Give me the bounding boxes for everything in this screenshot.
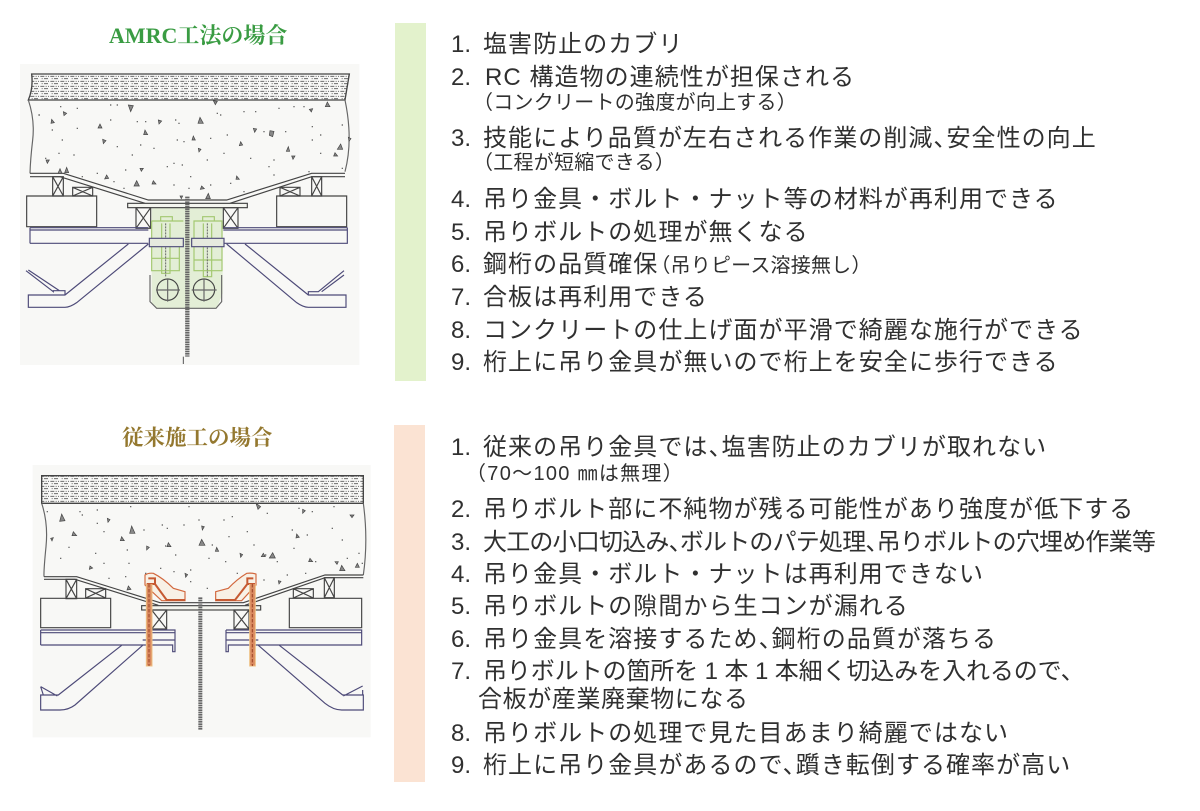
list: conventional method problems: 吊りボルトの箇所を 1 本 1 本細く切込みを入れるので、 <box>483 658 1085 685</box>
item 8 <box>451 720 1009 747</box>
list: AMRC method advantages: 9. <box>451 349 471 376</box>
list: AMRC method advantages: 桁上に吊り金具が無いので桁上を安全に歩行できる <box>483 349 1059 376</box>
item 5 <box>451 219 809 246</box>
list: AMRC method advantages: 塩害防止のカブリ <box>483 31 683 58</box>
list: AMRC method advantages: 6. <box>451 251 471 278</box>
list: conventional method problems: 8. <box>451 720 471 747</box>
list: AMRC method advantages: 1. <box>451 31 471 58</box>
heading: AMRC method: AMRC工法の場合 <box>109 23 287 48</box>
item 6 <box>451 626 997 653</box>
list: AMRC method advantages: 5. <box>451 219 471 246</box>
list: conventional method problems: 従来の吊り金具では、塩害防止のカブリが取れない <box>483 434 1047 461</box>
list: AMRC method advantages: 4. <box>451 186 471 213</box>
list: conventional method problems: 吊りボルトの処理で見た目あまり綺麗ではない <box>483 720 1009 747</box>
item 9 <box>451 752 1071 779</box>
list: conventional method problems: 4. <box>451 561 471 588</box>
list: conventional method problems: 合板が産業廃棄物になる <box>478 686 749 713</box>
list: conventional method problems: 7. <box>451 658 471 685</box>
list: AMRC method advantages: 鋼桁の品質確保（吊りピース溶接無し） <box>483 251 872 278</box>
item 8 <box>451 317 1084 344</box>
bar: orange marker <box>394 425 425 782</box>
item 1 note: （70～100 ㎜は無理） <box>466 463 684 485</box>
item 4 <box>451 186 1059 213</box>
item 3 <box>451 125 1097 152</box>
list: AMRC method advantages: 3. <box>451 125 471 152</box>
list: conventional method problems: 3. <box>451 529 471 556</box>
list: conventional method problems: 桁上に吊り金具があるので、躓き転倒する確率が高い <box>483 752 1071 779</box>
list: conventional method problems: 大工の小口切込み、ボルトのパテ処理、吊りボルトの穴埋め作業等 <box>483 529 1155 556</box>
list: conventional method problems: 1. <box>451 434 471 461</box>
item 3 <box>451 529 1155 556</box>
list: conventional method problems: 5. <box>451 593 471 620</box>
bar: green marker <box>395 23 426 381</box>
list: AMRC method advantages: 技能により品質が左右される作業の削減、安全性の向上 <box>483 125 1097 152</box>
list: AMRC method advantages: 8. <box>451 317 471 344</box>
list: conventional method problems: 吊りボルトの隙間から生コンが漏れる <box>483 593 909 620</box>
item 7 <box>451 284 708 311</box>
list: conventional method problems: 2. <box>451 496 471 523</box>
item 7 <box>451 658 1085 685</box>
item 9 <box>451 349 1059 376</box>
item 1 <box>451 434 1047 461</box>
list: conventional method problems: 吊りボルト部に不純物が残る可能性があり強度が低下する <box>483 496 1134 523</box>
list: conventional method problems: 6. <box>451 626 471 653</box>
heading: conventional method: 従来施工の場合 <box>122 426 273 450</box>
item 1 <box>451 31 683 58</box>
item 2 <box>451 64 855 91</box>
list: AMRC method advantages: コンクリートの仕上げ面が平滑で綺麗な施行ができる <box>483 317 1084 344</box>
list: AMRC method advantages: 2. <box>451 64 471 91</box>
item 2 <box>451 496 1134 523</box>
item 3 note: （工程が短縮できる） <box>473 152 675 174</box>
list: AMRC method advantages <box>451 31 1097 376</box>
list: conventional method problems: 吊り金具・ボルト・ナットは再利用できない <box>483 561 984 588</box>
item 4 <box>451 561 984 588</box>
list: AMRC method advantages: 吊りボルトの処理が無くなる <box>483 219 809 246</box>
list: AMRC method advantages: 7. <box>451 284 471 311</box>
item 6 <box>451 251 872 278</box>
list: conventional method problems: 9. <box>451 752 471 779</box>
list: AMRC method advantages: 合板は再利用できる <box>483 284 708 311</box>
item 2 note: （コンクリートの強度が向上する） <box>473 92 797 114</box>
item 5 <box>451 593 909 620</box>
list: AMRC method advantages: 吊り金具・ボルト・ナット等の材料が再利用できる <box>483 186 1059 213</box>
list: conventional method problems: 吊り金具を溶接するため、鋼桁の品質が落ちる <box>483 626 997 653</box>
list: AMRC method advantages: RC 構造物の連続性が担保される <box>485 64 855 91</box>
